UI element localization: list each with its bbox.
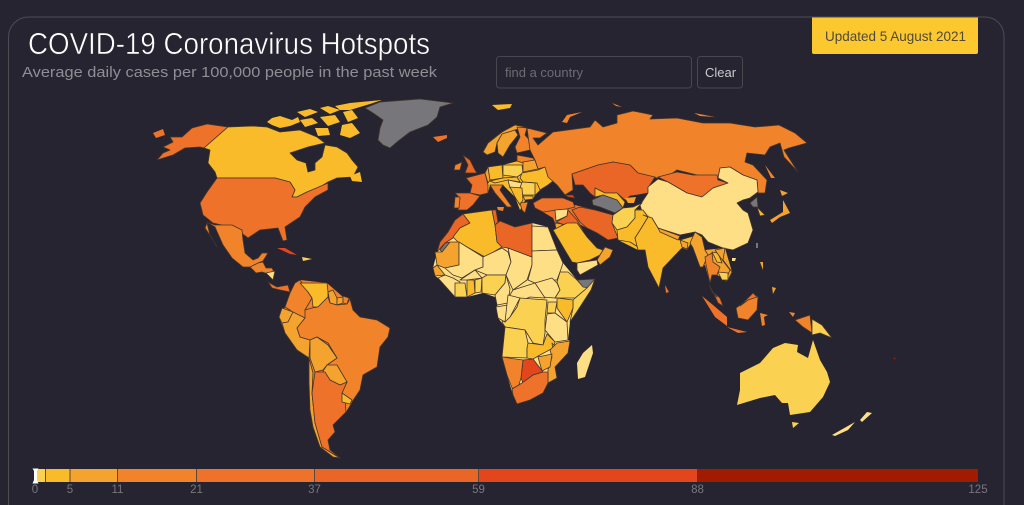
legend: tick labels	[32, 484, 988, 496]
legend: tick labels: 59	[472, 484, 485, 496]
legend: tick labels: 88	[691, 484, 704, 496]
title: COVID-19 Coronavirus Hotspots	[28, 26, 430, 61]
world choropleth map	[153, 99, 896, 458]
legend: tick labels: 21	[190, 484, 203, 496]
region: Russia and Central Asia	[492, 103, 807, 250]
region: Middle East and South Asia	[533, 195, 697, 293]
region: Europe	[433, 125, 557, 213]
region: South America	[279, 280, 390, 458]
legend: tick labels: 37	[308, 484, 321, 496]
region: North America	[153, 99, 453, 292]
updated date badge	[812, 18, 978, 54]
legend: tick labels: 125	[968, 484, 988, 496]
clear button	[698, 56, 742, 88]
legend: tick labels: 0	[32, 484, 38, 496]
search input	[496, 56, 692, 88]
updated date badge: Updated 5 August 2021	[825, 28, 966, 44]
region: Oceania	[737, 319, 896, 436]
search input: find a country	[505, 65, 584, 80]
region: East and Southeast Asia	[690, 190, 812, 333]
region: Africa	[433, 210, 595, 404]
legend: slider handle	[32, 468, 38, 484]
clear button: Clear	[705, 65, 737, 80]
legend: tick labels: 5	[67, 484, 73, 496]
legend: tick labels: 11	[112, 484, 123, 496]
legend: colour scale bar	[35, 469, 978, 482]
subtitle: Average daily cases per 100,000 people in the past week	[22, 64, 438, 81]
